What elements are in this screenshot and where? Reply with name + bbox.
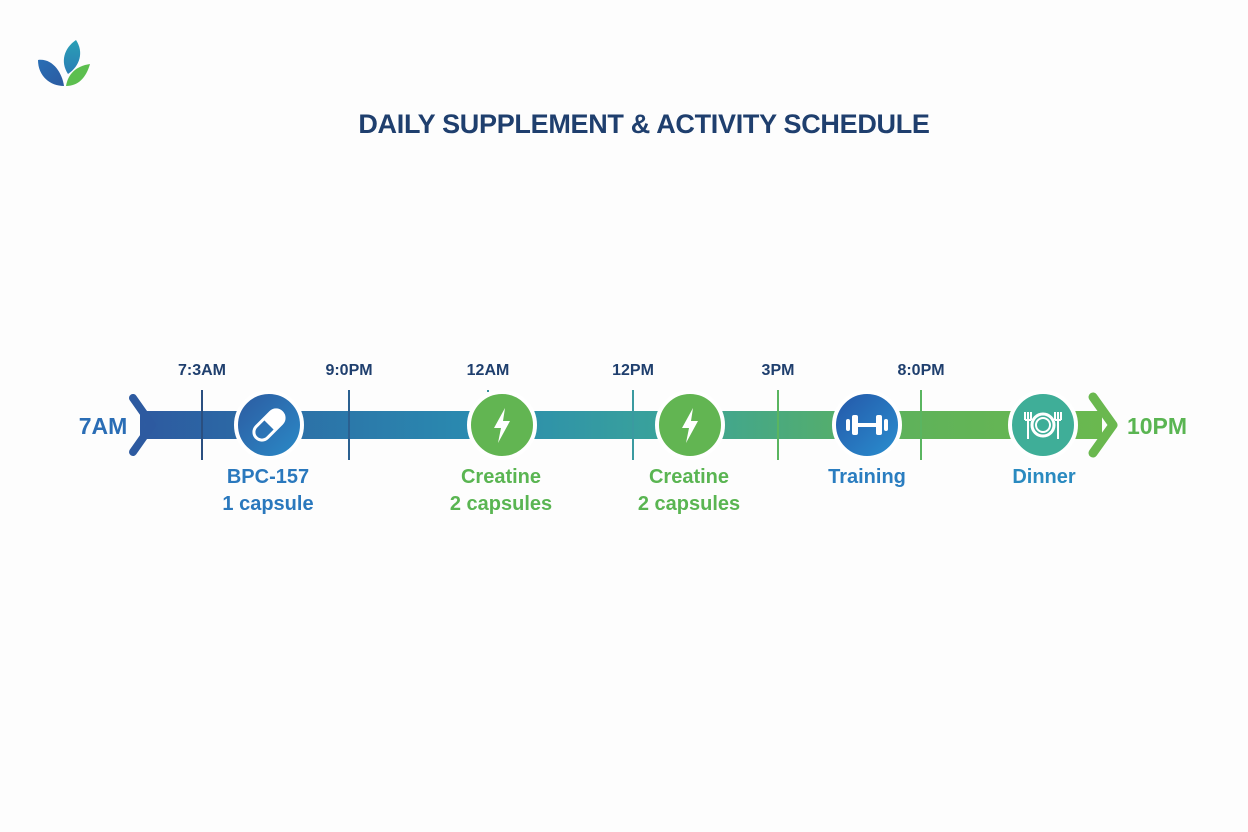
icon: dumbbell bbox=[832, 394, 902, 456]
time labels: 12AM bbox=[467, 362, 509, 379]
time labels: 7:3AM bbox=[178, 362, 226, 379]
label: creatine 2: Creatine bbox=[649, 466, 729, 488]
label: creatine 2 bbox=[638, 466, 740, 515]
label: creatine 1 bbox=[450, 466, 552, 515]
start label: 7AM bbox=[79, 413, 127, 439]
label: dinner: Dinner bbox=[1012, 466, 1076, 488]
label: creatine 1: 2 capsules bbox=[450, 493, 552, 515]
time labels: 12PM bbox=[612, 362, 654, 379]
label: training: Training bbox=[828, 466, 906, 488]
time labels bbox=[178, 362, 945, 379]
label: BPC-157: BPC-157 bbox=[227, 466, 309, 488]
time labels: 9:0PM bbox=[325, 362, 373, 379]
icon: pill bbox=[234, 394, 304, 456]
time labels: 3PM bbox=[762, 362, 794, 379]
label: creatine 2: 2 capsules bbox=[638, 493, 740, 515]
label: BPC-157: 1 capsule bbox=[222, 493, 314, 515]
label: BPC-157 bbox=[222, 466, 314, 515]
icon: bolt 2 bbox=[655, 394, 725, 456]
title: DAILY SUPPLEMENT & ACTIVITY SCHEDULE bbox=[358, 109, 930, 139]
label: creatine 1: Creatine bbox=[461, 466, 541, 488]
time labels: 8:0PM bbox=[897, 362, 945, 379]
icon: plate bbox=[1008, 394, 1078, 456]
icon: bolt 1 bbox=[467, 394, 537, 456]
timeline bbox=[129, 390, 1118, 460]
logo bbox=[38, 40, 90, 86]
end label: 10PM bbox=[1127, 413, 1187, 439]
